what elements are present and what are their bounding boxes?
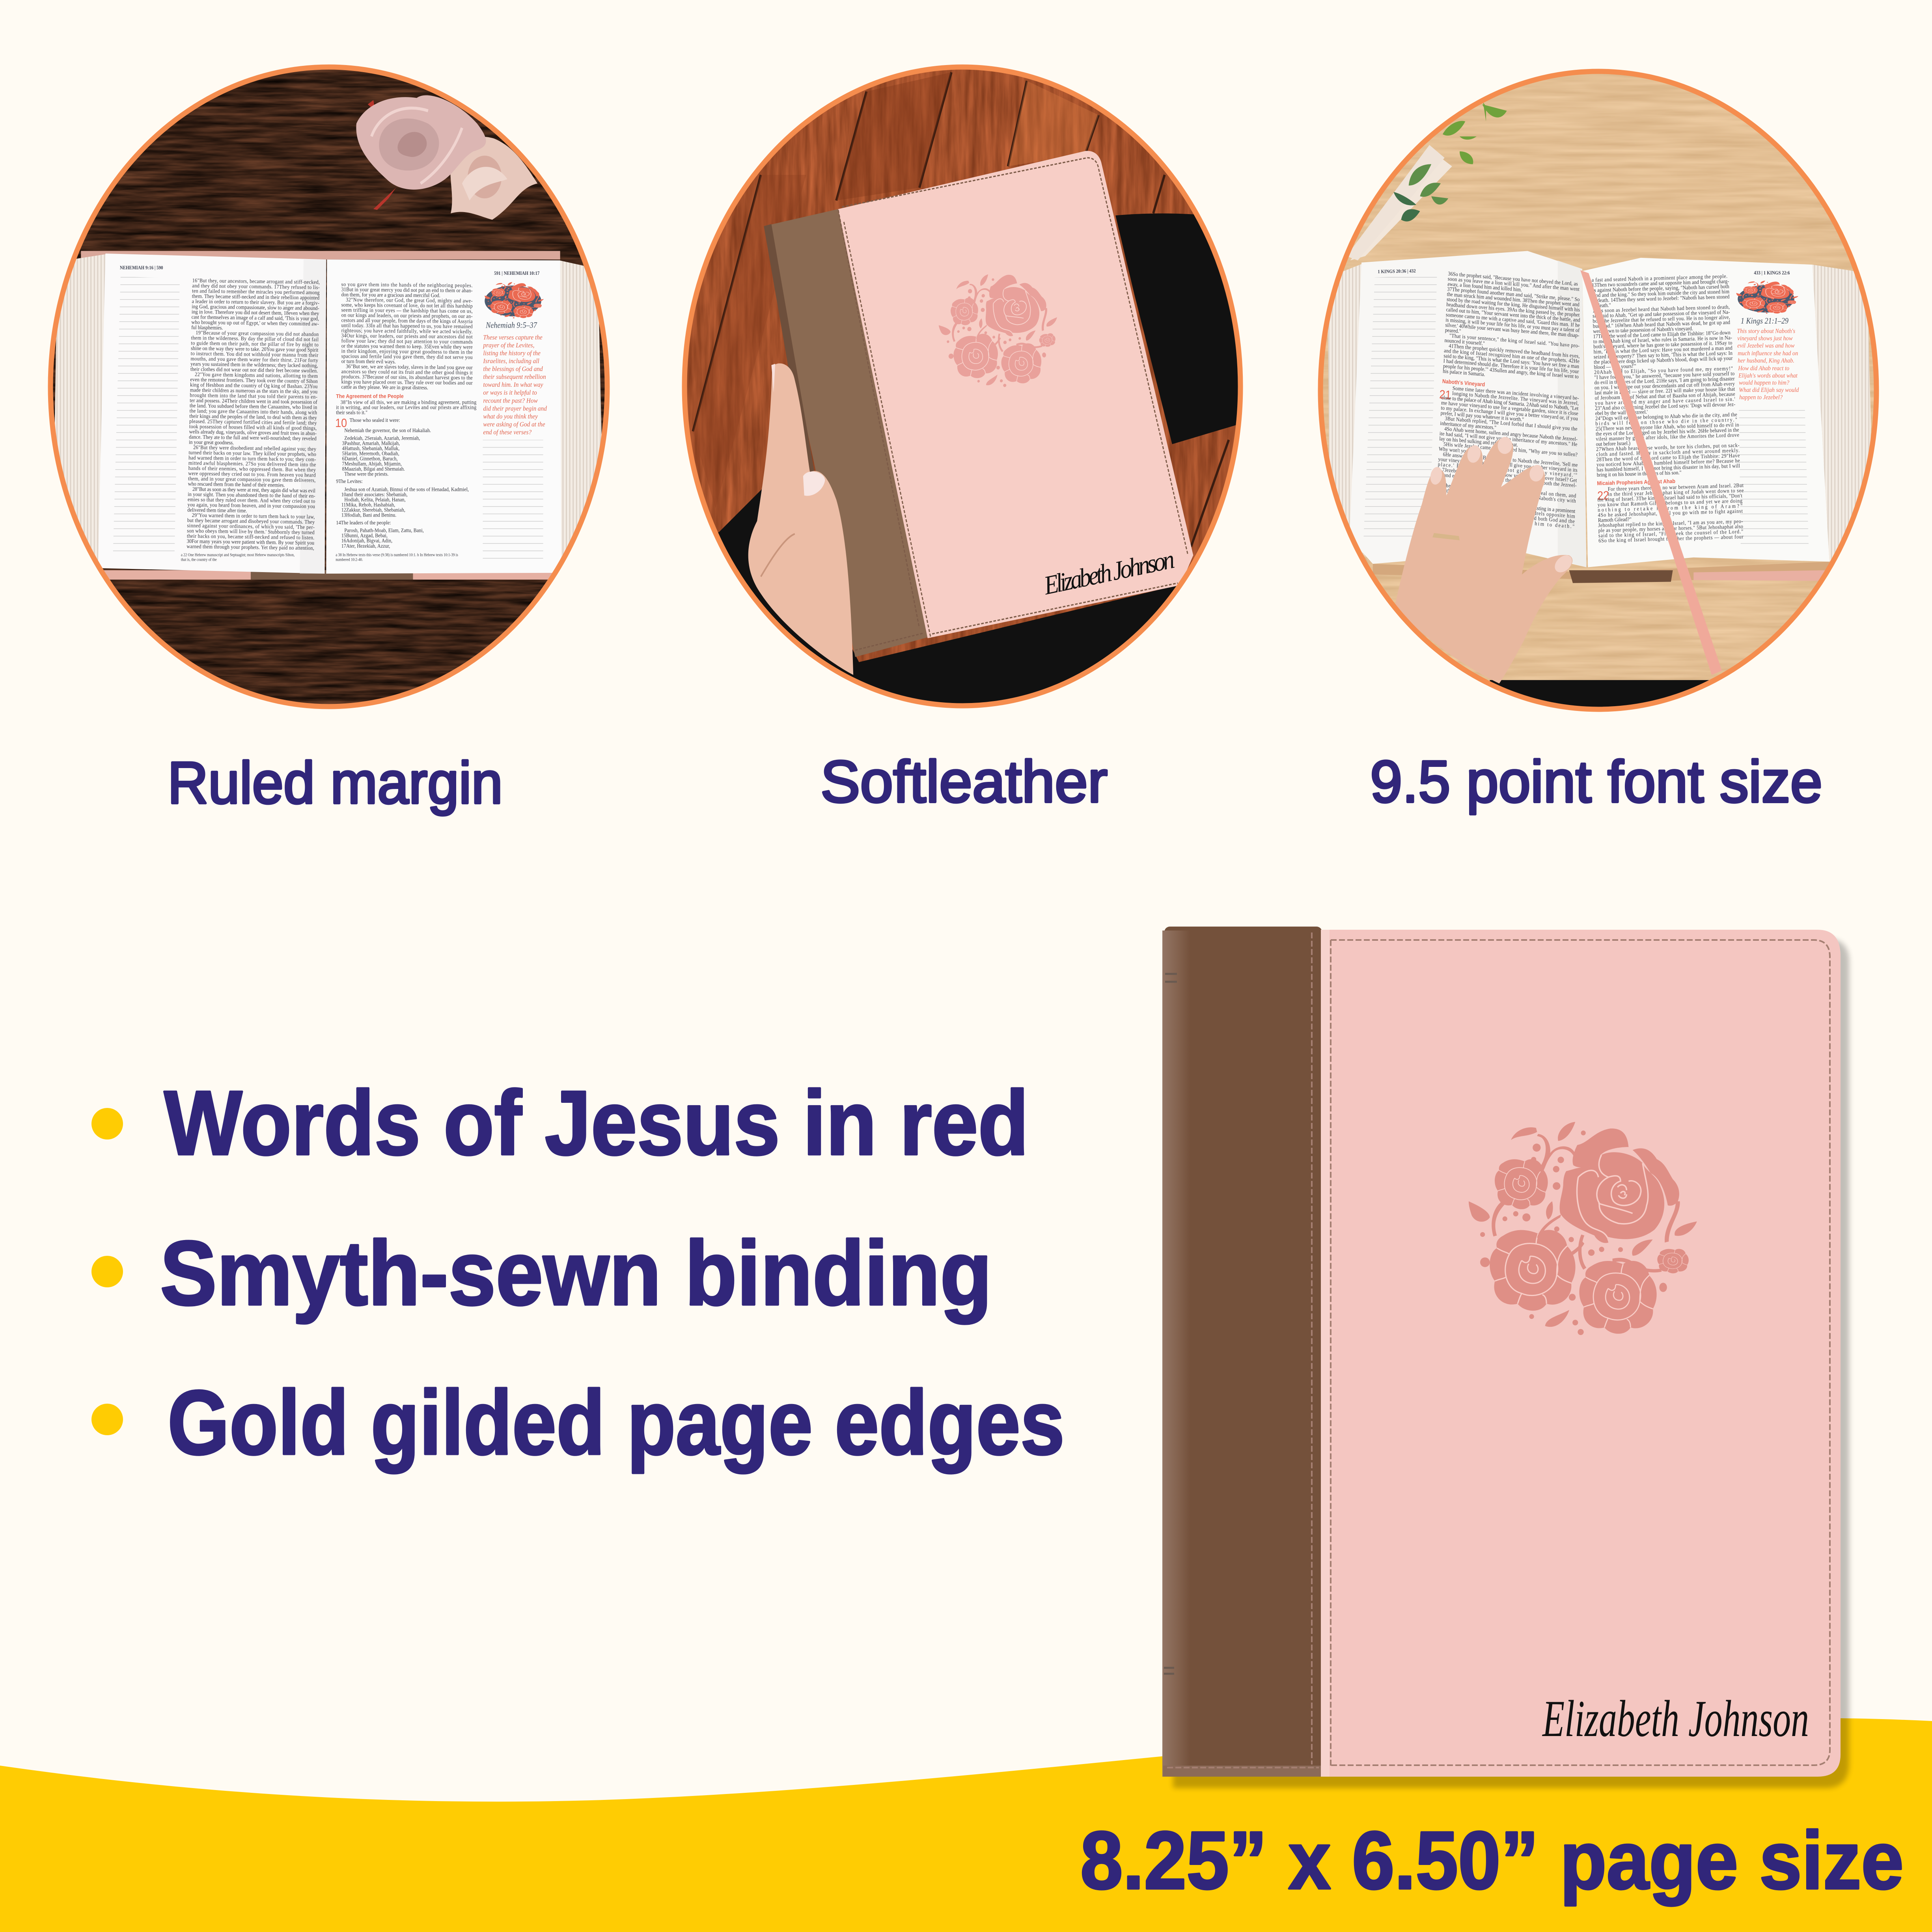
left page scripture text: king of Heshbon and the country of Og king of Bashan. 23You <box>190 381 318 390</box>
left page scripture text: ing God, gracious and compassionate, slow to anger and abound- <box>192 303 319 311</box>
left page scripture text: the man struck him and wounded him. 38Then the prophet went and <box>1447 291 1580 308</box>
margin devotional note: what do you think they <box>483 412 538 420</box>
right page scripture text: you know that Ramoth Gilead belongs to us and yet we are doing <box>1598 498 1743 508</box>
section heading and verse list: 6Daniel, Ginnethon, Baruch, <box>342 455 398 462</box>
section heading and verse list: 10and their associates: Shebaniah, <box>341 491 408 498</box>
margin devotional note: prayer of the Levites, <box>483 341 534 349</box>
feature bullet list <box>91 1072 1065 1474</box>
left page scripture text: peared." <box>1445 327 1461 334</box>
bullet dot 3 <box>91 1404 123 1435</box>
left page scripture text: Why won't you eat?" <box>1439 446 1479 455</box>
right page scripture text <box>341 281 473 391</box>
left page scripture text: hands of their enemies, who oppressed them. But when they <box>188 465 316 473</box>
left page scripture text: to instruct them. You did not withhold your manna from their <box>191 350 319 358</box>
left page scripture text: had warned them in order to turn them back to you; they com- <box>188 455 316 462</box>
left page scripture text: place.' But he said, 'I will not give you my vineyard.'" <box>1438 461 1578 478</box>
section heading and verse list: it in writing, and our leaders, our Levites and our priests are affixing <box>336 404 477 410</box>
right page scripture text <box>1592 272 1745 544</box>
margin devotional note <box>483 333 547 436</box>
left page scripture text: 4So Ahab went home, sullen and angry because Naboth the Jezreel- <box>1444 425 1578 442</box>
section heading and verse list: 17Ater, Hezekiah, Azzur, <box>341 543 390 549</box>
left page scripture text: in your great goodness. <box>189 439 234 446</box>
section heading and verse list: 8Maaziah, Bilgai and Shemaiah. <box>342 466 405 472</box>
closed bible: Elizabeth Johnson <box>1042 544 1177 600</box>
left page scripture text: who brought you up out of Egypt,' or when they committed aw- <box>191 319 319 327</box>
icon: coloured rose illustration <box>485 282 544 318</box>
margin devotional note: This story about Naboth's <box>1737 328 1795 335</box>
left page scripture text: you again, you heard from heaven, and in your compassion you <box>187 502 315 509</box>
section heading and verse list: 10 <box>335 417 347 430</box>
black clothing <box>663 213 1281 739</box>
left page scripture text: and they did not obey your commands. 17They refused to lis- <box>192 282 320 290</box>
section heading and verse list: Nehemiah the governor, the son of Hakaliah. <box>344 427 431 433</box>
margin devotional note: would happen to him? <box>1739 379 1789 386</box>
right page scripture text: 28Then the word of the Lord came to Elijah the Tishbite: 29"Have <box>1596 452 1740 462</box>
left page scripture text: even the remotest frontiers. They took over the country of Sihon <box>190 376 318 384</box>
ruled left margin <box>113 277 180 555</box>
left page scripture text: 7Jezebel his wife said, "Is this how you act as king over Israel? Get <box>1442 466 1577 483</box>
right page scripture text: produces. 37Because of our sins, its abundant harvest goes to the <box>341 373 473 381</box>
left page scripture text: place among the people. But seat two scoundrels opposite him <box>1436 502 1575 519</box>
right page scripture text: Ramoth Gilead?" <box>1598 516 1632 523</box>
right page scripture text: righteous; you have acted faithfully, while we acted wickedly. <box>341 327 473 335</box>
margin devotional note <box>1737 328 1799 401</box>
left page scripture text: their backs on you, became stiff-necked and refused to listen. <box>187 533 315 541</box>
left page scripture text: me have your vineyard to use for a vegetable garden, since it is close <box>1441 399 1578 416</box>
right page scripture text: went down to take possession of Naboth's vineyard. <box>1593 325 1693 334</box>
left page scripture text: 36So the prophet said, "Because you have not obeyed the Lord, as <box>1448 270 1578 287</box>
left page scripture text: soon as you leave me a lion will kill you." And after the man went <box>1447 276 1580 292</box>
right page scripture text: 22 <box>1597 489 1609 503</box>
left page scripture text: prefer, I will pay you whatever it is worth." <box>1440 410 1524 423</box>
left page scripture text: but they became arrogant and disobeyed your commands. They <box>187 517 315 525</box>
section heading and verse list: Jeshua son of Azaniah, Binnui of the sons of Henadad, Kadmiel, <box>344 486 469 492</box>
section heading and verse list: 38"In view of all this, we are making a binding agreement, putting <box>341 399 477 405</box>
left page scripture text: to guide them on their path, nor the pillar of fire by night to <box>191 340 319 348</box>
left page scripture text: turned their backs on your law. They killed your prophets, who <box>188 449 316 457</box>
right page scripture text: a fast and seated Naboth in a prominent place among the people. <box>1592 273 1727 283</box>
right page scripture text: the eyes of the Lord, urged on by Jezebel his wife. 26He behaved in the <box>1596 427 1739 437</box>
right page scripture text: 6So the king of Israel brought together the prophets — about four <box>1598 533 1744 544</box>
left page scripture text: made their children as numerous as the stars in the sky, and you <box>190 387 318 395</box>
right page scripture text: cattle as they please. We are in great distress. <box>341 384 428 391</box>
left page scripture text: them in the wilderness. By day the pillar of cloud did not fail <box>191 334 319 343</box>
right page scripture text: some, who keeps his covenant of love, do not let all this hardship <box>341 302 473 309</box>
left page scripture text: who rescued them from the hand of their enemies. <box>188 481 285 488</box>
yellow wave band <box>0 1718 1932 1932</box>
left page scripture text: called out to him, "Your servant went into the thick of the battle, and <box>1446 306 1580 323</box>
closed bible cover <box>1162 927 1849 1788</box>
right page scripture text: the king of Israel. 3The king of Israel had said to his officials, "Don't <box>1597 492 1742 503</box>
section heading and verse list: Zedekiah, 2Seraiah, Azariah, Jeremiah, <box>344 435 420 441</box>
caption: ruled margin: Ruled margin <box>168 750 503 816</box>
panel: font size photo <box>1301 55 1905 739</box>
panel: softleather photo <box>663 55 1281 739</box>
left page scripture text <box>186 277 320 551</box>
section heading and verse list: 12Zakkur, Sherebiah, Shebaniah, <box>341 507 405 513</box>
left page scripture text: said to the king, "This is what the Lord says: 'You have set free a man <box>1443 352 1580 369</box>
right page scripture text: or turn from their evil ways. <box>341 358 396 365</box>
feature: words of Jesus: Words of Jesus in red <box>164 1072 1029 1174</box>
right page scripture text: to death. 14Then they sent word to Jezebel: "Naboth has been stoned <box>1592 293 1730 304</box>
left page scripture text: your vineyard; or if you prefer, I will give you another vineyard in its <box>1438 456 1578 473</box>
right page scripture text: cloth and fasted. He lay in sackcloth and went around meekly. <box>1596 447 1740 457</box>
section heading and verse list: 7Meshullam, Abijah, Mijamin, <box>342 461 402 467</box>
right page scripture text: Micaiah Prophesies Against Ahab <box>1597 478 1675 487</box>
left page scripture text: to my palace. In exchange I will give you a better vineyard or, if you <box>1441 405 1578 421</box>
bullet dot 1 <box>91 1108 123 1139</box>
right page scripture text: es against Naboth before the people, saying, "Naboth has cursed both <box>1592 283 1729 293</box>
left page scripture text: 19"Because of your great compassion you did not abandon <box>196 329 319 337</box>
left page scripture text: in your sight. Then you abandoned them to the hand of their en- <box>188 491 315 499</box>
section heading and verse list: Those who sealed it were: <box>350 417 400 423</box>
right page scripture text: do evil in the eyes of the Lord. 21He says, 'I am going to bring disaster <box>1594 375 1735 386</box>
right page scripture text: birds will feed on those who die in the country." <box>1595 416 1737 427</box>
orange ring <box>1320 71 1876 709</box>
left page header: NEHEMIAH 9:16 | 590 <box>120 265 163 270</box>
orange ring <box>50 67 607 707</box>
section heading and verse list: 4Hattush, Shebaniah, Malluk, <box>342 445 399 451</box>
left page scripture text: son who obeys them will live by them.' Stubbornly they turned <box>187 528 315 535</box>
margin reference: 1 Kings 21:1–29 <box>1741 317 1788 326</box>
right page scripture text: kings you have placed over us. They rule over our bodies and our <box>341 379 473 386</box>
margin devotional note: Israelites, including all <box>483 357 539 365</box>
left page scripture text: brought them into the land that you told their parents to en- <box>190 392 317 400</box>
left page scripture text: 30For many years you were patient with them. By your Spirit you <box>187 538 315 546</box>
left page scripture text: lay on his bed sulking and refused to eat. <box>1439 435 1518 448</box>
section heading and verse list: 15Bunni, Azgad, Bebai, <box>341 532 388 539</box>
left page scripture text: silver.' 40While your servant was busy here and there, the man disap- <box>1445 322 1580 339</box>
left page scripture text: 22"You gave them kingdoms and nations, allotting to them <box>195 371 318 379</box>
left page scripture text: them. They became stiff-necked and in their rebellion appointed <box>192 293 320 301</box>
left page scripture text: and have them bring charges that he has cursed both God and the <box>1435 507 1575 524</box>
section heading and verse list: a 22 One Hebrew manuscript and Septuagint; most Hebrew manuscripts Sihon, <box>181 553 295 558</box>
left page scripture text: wells already dug, vineyards, olive groves and fruit trees in abun- <box>189 428 317 436</box>
margin devotional note: What did Elijah say would <box>1739 386 1799 393</box>
right page scripture text: 24"Dogs will eat those belonging to Ahab who die in the city, and the <box>1595 411 1737 421</box>
section heading and verse list: 9The Levites: <box>336 478 363 484</box>
right page scripture text: has humbled himself, I will not bring this disaster in his day, but I will <box>1596 462 1740 473</box>
margin reference: Nehemiah 9:5–37 <box>485 321 537 330</box>
right page scripture text: cestors and all your people, from the days of the kings of Assyria <box>341 317 473 324</box>
margin devotional note: the blessings of God and <box>483 365 543 373</box>
personalised name: Elizabeth Johnson <box>1542 1690 1809 1747</box>
right page scripture text: last male in Israel — slave or free. 22I will make your house like that <box>1594 386 1735 396</box>
margin devotional note: her husband, King Ahab. <box>1738 357 1794 364</box>
margin devotional note: did their prayer begin and <box>483 404 547 412</box>
right page scripture text: so you gave them into the hands of the neighboring peoples. <box>341 281 473 289</box>
left page scripture text: away, a lion found him and killed him. <box>1447 281 1522 293</box>
right page scripture text: or the statutes you warned them to keep. 35Even while they were <box>341 343 473 350</box>
white planter and greenery <box>1346 102 1507 260</box>
right page scripture text: spacious and fertile land you gave them, they did not serve you <box>341 353 473 360</box>
left page scripture text: stood by the road waiting for the king. He disguised himself with his <box>1447 296 1580 313</box>
margin devotional note: listing the history of the <box>483 349 541 357</box>
right page scripture text: ancestors so they could eat its fruit and the other good things it <box>341 368 473 376</box>
right page scripture text: seem trifling in your eyes — the hardship that has come on us, <box>341 307 473 314</box>
left page scripture text: a leader in order to return to their slavery. But you are a forgiv- <box>192 298 319 306</box>
margin devotional note: toward him. In what way <box>483 380 543 388</box>
section heading and verse list: numbered 10:2-40. <box>336 558 363 562</box>
left page scripture text: were oppressed they cried out to you. From heaven you heard <box>188 470 316 478</box>
left page scripture text: mouths, and you gave them water for their thirst. 21For forty <box>190 355 318 364</box>
section heading and verse list: The Agreement of the People <box>336 393 404 399</box>
right page scripture text: For three years there was no war between Aram and Israel. 2But <box>1608 482 1744 492</box>
ruled right margin <box>483 440 543 562</box>
left page scripture text: 21 <box>1439 388 1451 402</box>
right page scripture text: in the third year Jehoshaphat king of Judah went down to see <box>1608 487 1744 497</box>
left page scripture text: headband down over his eyes. 39As the king passed by, the prophet <box>1446 301 1580 318</box>
left page scripture text: and the king of Israel recognized him as one of the prophets. 42He <box>1444 347 1580 364</box>
left page scripture text: emies so that they ruled over them. And when they cried out to <box>188 496 315 504</box>
section heading and verse list: 14The leaders of the people: <box>336 520 391 526</box>
right page scripture text: to death." <box>1592 302 1611 309</box>
right page scripture text: 25(There was never anyone like Ahab, who sold himself to do evil in <box>1596 421 1739 432</box>
pink roses decoration <box>356 95 537 220</box>
right page scripture text: 4So he asked Jehoshaphat, "Will you go with me to fight against <box>1598 508 1743 518</box>
panel: font size photo: 433 | 1 KINGS 22:6 <box>1754 270 1790 276</box>
section heading and verse list: 3Pashhur, Amariah, Malkijah, <box>342 440 400 446</box>
right page scripture text: 31But in your great mercy you did not put an end to them or aban- <box>341 286 473 294</box>
right page scripture text: the place where dogs licked up Naboth's blood, dogs will lick up your <box>1594 355 1733 365</box>
left page scripture text: pleased. 25They captured fortified cities and fertile land; they <box>189 418 317 426</box>
right page scripture text: 34Our kings, our leaders, our priests and our ancestors did not <box>341 332 473 340</box>
margin devotional note: These verses capture the <box>483 333 543 341</box>
section heading and verse list: 13Hodiah, Bani and Beninu. <box>341 512 396 518</box>
right page scripture text: nothing to retake it from the king of Aram?" <box>1598 503 1743 513</box>
left page scripture text: sent them to the elders and nobles who lived in Naboth's city with <box>1436 487 1576 504</box>
right page scripture text: 13Then two scoundrels came and sat opposite him and brought charg- <box>1592 278 1729 288</box>
margin devotional note: their subsequent rebellion <box>483 373 546 380</box>
open bible page edges and cover <box>54 251 602 580</box>
caption: font size: 9.5 point font size <box>1370 748 1822 815</box>
right page scripture text: in their kingdom, enjoying your great goodness to them in the <box>341 348 473 355</box>
right page scripture text: said to the king of Israel, "First seek the counsel of the Lord." <box>1598 528 1743 539</box>
right page scripture text: on our kings and leaders, on our priests and prophets, on our an- <box>341 312 473 319</box>
left page scripture text: ing in love. Therefore you did not desert them, 18even when they <box>192 308 319 317</box>
right page scripture text: both's vineyard, where he has gone to take possession of it. 19Say to <box>1593 339 1732 350</box>
left page scripture text: 41Then the prophet quickly removed the headband from his eyes, <box>1449 343 1580 359</box>
right page scripture text: 32"Now therefore, our God, the great God, mighty and awe- <box>346 297 473 304</box>
section heading and verse list: These were the priests. <box>344 471 388 477</box>
right page scripture text: of Jeroboam son of Nebat and that of Baasha son of Ahijah, because <box>1594 391 1735 401</box>
left page scripture text: dance. They ate to the full and were well-nourished; they reveled <box>189 434 317 442</box>
right page scripture text: him, 'This is what the Lord says: Have you not murdered a man and <box>1593 345 1732 355</box>
pink cover <box>1321 930 1841 1777</box>
left page scripture text: 3But Naboth replied, "The Lord forbid that I should give you the <box>1445 415 1578 432</box>
left page scripture text: mitted awful blasphemies. 27So you delivered them into the <box>188 460 316 468</box>
left page scripture text: ful blasphemies. <box>191 324 223 331</box>
black gap at bottom <box>1490 680 1724 731</box>
right page scripture text: 27When Ahab heard these words, he tore his clothes, put on sack- <box>1596 442 1740 452</box>
left page scripture text: "That is your sentence," the king of Israel said. "You have pro- <box>1449 332 1580 349</box>
left page scripture text: 5His wife Jezebel came in and asked him, "Why are you so sullen? <box>1443 441 1578 458</box>
section heading and verse list: 11Mika, Rehob, Hashabiah, <box>341 502 395 508</box>
right page scripture text: both the Jezreelite that he refused to sell you. He is no longer alive, <box>1593 314 1730 324</box>
right page scripture text: 20Ahab said to Elijah, "So you have found me, my enemy!" <box>1594 365 1733 375</box>
section heading and verse list: 16Adonijah, Bigvai, Adin, <box>341 537 392 544</box>
left page scripture text <box>1433 270 1588 530</box>
stitching <box>1167 932 1830 1768</box>
left page scripture text: nounced it yourself." <box>1444 337 1485 347</box>
section heading and verse list: Hodiah, Kelita, Pelaiah, Hanan, <box>344 496 406 503</box>
left page scripture text: up and eat! Cheer up. I'll get you the vineyard of Naboth the Jezreel- <box>1437 471 1577 489</box>
left page scripture text: 6He answered her, "Because I said to Naboth the Jezreelite, 'Sell me <box>1443 451 1578 468</box>
left page scripture text: them, and in your great compassion you gave them deliverers, <box>188 475 316 483</box>
right page scripture text: on you. I will wipe out your descendants and cut off from Ahab every <box>1594 380 1735 391</box>
feature: smyth-sewn: Smyth-sewn binding <box>160 1222 992 1324</box>
closed bible <box>764 151 1193 657</box>
drop shadow <box>1173 938 1849 1788</box>
section heading and verse list <box>181 393 477 562</box>
margin devotional note: were asking of God at the <box>483 420 545 428</box>
right page scripture text: you noticed how Ahab has humbled himself before me? Because he <box>1596 457 1740 468</box>
margin devotional note: end of these verses? <box>483 428 532 436</box>
left page scripture text: ter and possess. 24Their children went in and took possession of <box>190 397 317 405</box>
margin devotional note: much influence she had on <box>1738 350 1798 357</box>
right page scripture text: she said to Ahab, "Get up and take possession of the vineyard of Na- <box>1593 309 1730 319</box>
margin devotional note: How did Ahab react to <box>1738 365 1789 372</box>
left page scripture text: is missing, it will be your life for his life, or you must pay a talent of <box>1445 317 1580 334</box>
left page scripture text: 16"But they, our ancestors, became arrogant and stiff-necked, <box>192 277 320 285</box>
right page scripture text: bring it on his house in the days of his son." <box>1597 469 1682 478</box>
left page scripture text: 26"But they were disobedient and rebelled against you; they <box>193 444 317 452</box>
left page scripture text: delivered them time after time. <box>187 507 247 514</box>
wooden floor <box>670 55 1274 739</box>
left page scripture text: 29"You warned them in order to turn them back to your law, <box>192 512 315 520</box>
left page scripture text: years you sustained them in the wilderness; they lacked nothing, <box>190 360 318 369</box>
left page scripture text: Naboth's Vineyard <box>1442 378 1485 388</box>
icon: coloured rose illustration <box>1736 281 1798 314</box>
open bible <box>1328 251 1871 583</box>
right page scripture text: don them, for you are a gracious and merciful God. <box>341 291 440 298</box>
bullet dot 2 <box>91 1256 123 1287</box>
brown spine <box>1162 927 1322 1777</box>
left page scripture text: king. Then take him out and stone him to death." <box>1435 512 1575 530</box>
left page scripture text: close to the palace of Ahab king of Samaria. 2Ahab said to Naboth, "Let <box>1441 394 1579 411</box>
left page scripture text: longing to Naboth the Jezreelite. The vineyard was in Jezreel, <box>1452 390 1579 406</box>
right page scripture text: you have aroused my anger and have caused Israel to sin.' <box>1595 396 1735 406</box>
left page scripture text: So she wrote letters in Ahab's name, placed his seal on them, and <box>1437 481 1576 499</box>
left page scripture text: ten and failed to remember the miracles you performed among <box>192 287 320 296</box>
left page scripture text: him. In those letters she wrote: "Proclaim a day of fasting in a prominent <box>1436 497 1576 514</box>
icon: embossed rose <box>1469 1122 1697 1335</box>
left page scripture text: the land; you gave the Canaanites into their hands, along with <box>190 408 317 416</box>
margin devotional note: happen to Jezebel? <box>1739 394 1783 401</box>
orange ring <box>684 67 1240 706</box>
section heading and verse list: Parosh, Pahath-Moab, Elam, Zattu, Bani, <box>344 527 424 533</box>
left page scripture text: I had determined should die. Therefore it is your life for his life, your <box>1443 358 1579 375</box>
right page scripture text: but dead." 16When Ahab heard that Naboth was dead, he got up and <box>1593 319 1731 329</box>
left page scripture text: people for his people.'" 43Sullen and angry, the king of Israel went to <box>1443 363 1579 380</box>
right page scripture text: Jehoshaphat replied to the king of Israel, "I am as you are, my peo- <box>1598 518 1743 528</box>
left page scripture text: 37The prophet found another man and said, "Strike me, please." So <box>1447 286 1580 302</box>
right page scripture text: 15As soon as Jezebel heard that Naboth had been stoned to death, <box>1593 304 1730 314</box>
margin devotional note: vineyard shows just how <box>1737 335 1793 342</box>
section heading and verse list: their seals to it." <box>336 409 367 416</box>
right page header: 591 | NEHEMIAH 10:17 <box>494 271 539 276</box>
left page scripture text: the land. You subdued before them the Canaanites, who lived in <box>190 402 317 410</box>
right page scripture text: ebel by the wall of Jezreel.' <box>1595 408 1648 416</box>
left page scripture text: inheritance of my ancestors." <box>1440 420 1497 431</box>
left page scripture text: sinned against your ordinances, of which you said, 'The per- <box>187 522 315 530</box>
left page scripture text: 28"But as soon as they were at rest, they again did what was evil <box>192 486 315 494</box>
hand holding book <box>748 364 853 675</box>
left page scripture text: Some time later there was an incident involving a vineyard be- <box>1453 385 1579 401</box>
right page scripture text: follow your law; they did not pay attention to your commands <box>341 338 473 345</box>
feature: gold gilded: Gold gilded page edges <box>168 1372 1065 1474</box>
right page scripture text: seized his property?' Then say to him, 'This is what the Lord says: In <box>1594 350 1733 360</box>
left page scripture text: took possession of houses filled with all kinds of good things, <box>189 423 317 431</box>
left page scripture text: their clothes did not wear out nor did their feet become swollen. <box>190 366 318 374</box>
margin devotional note: evil Jezebel was and how <box>1737 342 1795 349</box>
left page scripture text: shine on the way they were to take. 20You gave your good Spirit <box>191 345 319 353</box>
right page scripture text: until today. 33In all that has happened to us, you have remained <box>341 322 473 330</box>
left page scripture text: someone came to me with a captive and said, 'Guard this man. If he <box>1446 311 1580 328</box>
right page scripture text: 17Then the word of the Lord came to Elijah the Tishbite: 18"Go down <box>1593 329 1731 339</box>
left page scripture text: warned them through your prophets. Yet they paid no attention, <box>186 543 314 551</box>
margin devotional note: Elijah's words about what <box>1738 372 1798 379</box>
page headers: 1 KINGS 20:36 | 432 <box>1378 268 1416 274</box>
right page scripture text: vilest manner by going after idols, like the Amorites the Lord drove <box>1596 432 1739 442</box>
left page scripture text: cast for themselves an image of a calf and said, 'This is your god, <box>192 313 319 322</box>
margin devotional note: or ways is it helpful to <box>483 388 537 396</box>
right page scripture text: 23"And also concerning Jezebel the Lord says: 'Dogs will devour Jez- <box>1595 401 1735 411</box>
right page scripture text: 36"But see, we are slaves today, slaves in the land you gave our <box>346 363 473 371</box>
margin devotional note: recount the past? How <box>483 396 538 405</box>
section heading and verse list: that is, the country of the <box>181 558 217 562</box>
hand on page <box>1395 435 1575 683</box>
right page scripture text: God and the king." So they took him outside the city and stoned him <box>1592 288 1729 298</box>
right page scripture text: "I have found you," he answered, "because you have sold yourself to <box>1594 370 1735 380</box>
right page scripture text: to meet Ahab king of Israel, who rules in Samaria. He is now in Na- <box>1593 334 1732 345</box>
right page scripture text: out before Israel.) <box>1596 440 1630 447</box>
section heading and verse list: 5Harim, Meremoth, Obadiah, <box>342 450 399 457</box>
left page scripture text: ite had said, "I will not give you the inheritance of my ancestors." He <box>1440 430 1578 448</box>
dark wood table <box>53 69 605 704</box>
panel: ruled margin photo <box>48 65 610 709</box>
right page scripture text: ple as your people, my horses as your horses." 5But Jehoshaphat also <box>1598 523 1744 533</box>
caption: softleather: Softleather <box>821 748 1108 815</box>
pink ribbon bookmark <box>1580 270 1722 675</box>
right page scripture text: blood — yes, yours!'" <box>1594 363 1636 370</box>
left page scripture text: their kings and the peoples of the land, to deal with them as they <box>189 413 317 421</box>
left page scripture text: his palace in Samaria. <box>1443 368 1485 377</box>
section heading and verse list: a 38 In Hebrew texts this verse (9:38) is numbered 10:1. b In Hebrew texts 10:1-39 is <box>336 553 458 558</box>
oak table <box>1301 55 1905 739</box>
